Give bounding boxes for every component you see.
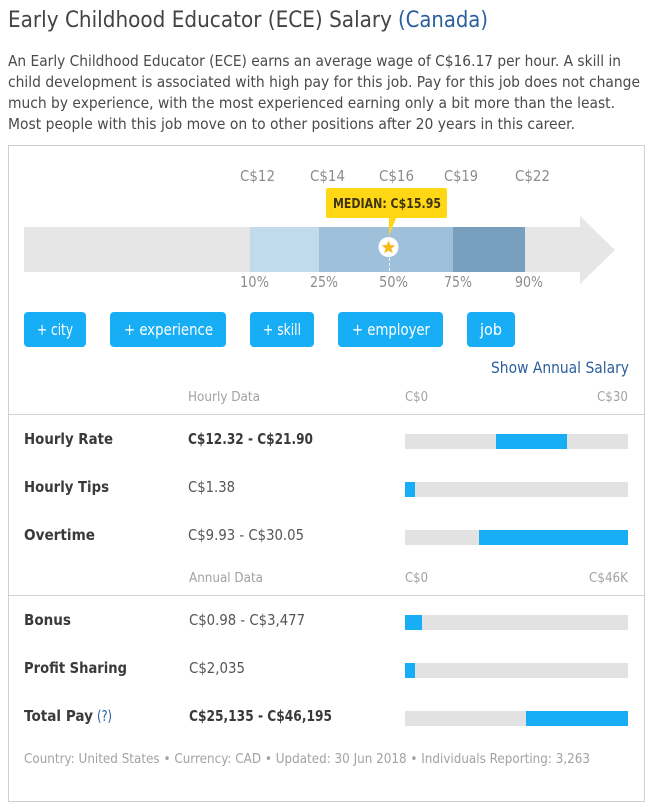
title: Early Childhood Educator (ECE) Salary — [8, 8, 392, 33]
row: hourly tips — [24, 478, 628, 497]
percentile labels: 75% — [444, 273, 472, 291]
annual data header: C$0 — [405, 570, 428, 586]
percentile labels: 25% — [310, 273, 338, 291]
icon: median star marker — [378, 237, 398, 257]
hourly data header: C$0 — [405, 389, 428, 405]
salary value labels — [240, 167, 550, 185]
row: hourly rate: Hourly Rate — [24, 430, 113, 448]
intro paragraph — [8, 52, 640, 133]
filter buttons — [24, 312, 515, 347]
row: hourly rate: C$12.32 - C$21.90 — [188, 430, 313, 448]
row: overtime: C$9.93 - C$30.05 — [188, 526, 304, 544]
row: hourly tips: C$1.38 — [188, 478, 235, 496]
row: overtime: Overtime — [24, 526, 95, 544]
hourly data header: Hourly Data — [188, 389, 260, 405]
row: hourly tips: Hourly Tips — [24, 478, 109, 496]
row: bonus: Bonus — [24, 611, 71, 629]
row: overtime — [24, 526, 628, 545]
salary value labels: C$22 — [515, 167, 550, 185]
intro paragraph: Most people with this job move on to other positions after 20 years in this career. — [8, 115, 575, 133]
panel: salary card — [8, 146, 644, 802]
row: profit sharing: Profit Sharing — [24, 659, 127, 677]
filter buttons: + experience — [124, 320, 213, 339]
filter buttons: job — [479, 320, 502, 339]
median tooltip: MEDIAN: C$15.95 — [333, 197, 441, 212]
row: profit sharing — [24, 659, 628, 678]
row: total pay: Total Pay — [24, 707, 93, 725]
title: (Canada) — [398, 8, 488, 33]
hourly data header: C$30 — [597, 389, 628, 405]
annual data header — [9, 570, 644, 596]
percentile arrow chart — [24, 216, 615, 284]
row: profit sharing: C$2,035 — [189, 659, 245, 677]
row: bonus: C$0.98 - C$3,477 — [189, 611, 305, 629]
percentile labels: 50% — [379, 273, 408, 291]
percentile labels — [240, 273, 543, 291]
show annual salary link: Show Annual Salary — [491, 358, 629, 377]
filter buttons: + employer — [352, 320, 430, 339]
row: total pay: (?) — [97, 707, 112, 725]
hourly data header — [9, 389, 644, 414]
filter buttons: + skill — [263, 320, 301, 339]
row: hourly rate — [24, 430, 628, 449]
annual data header: C$46K — [589, 570, 629, 586]
percentile labels: 10% — [240, 273, 269, 291]
filter buttons: + city — [37, 320, 73, 339]
row: total pay: C$25,135 - C$46,195 — [189, 707, 332, 725]
salary value labels: C$19 — [444, 167, 478, 185]
row: total pay — [24, 707, 628, 726]
percentile labels: 90% — [515, 273, 543, 291]
row: bonus — [24, 611, 628, 630]
salary value labels: C$12 — [240, 167, 275, 185]
annual data header: Annual Data — [189, 570, 263, 586]
median tooltip — [326, 188, 447, 236]
footer metadata: Country: United States • Currency: CAD • Updated: 30 Jun 2018 • Individuals Reporting: 3,263 — [24, 751, 590, 767]
salary value labels: C$16 — [379, 167, 414, 185]
salary value labels: C$14 — [310, 167, 345, 185]
